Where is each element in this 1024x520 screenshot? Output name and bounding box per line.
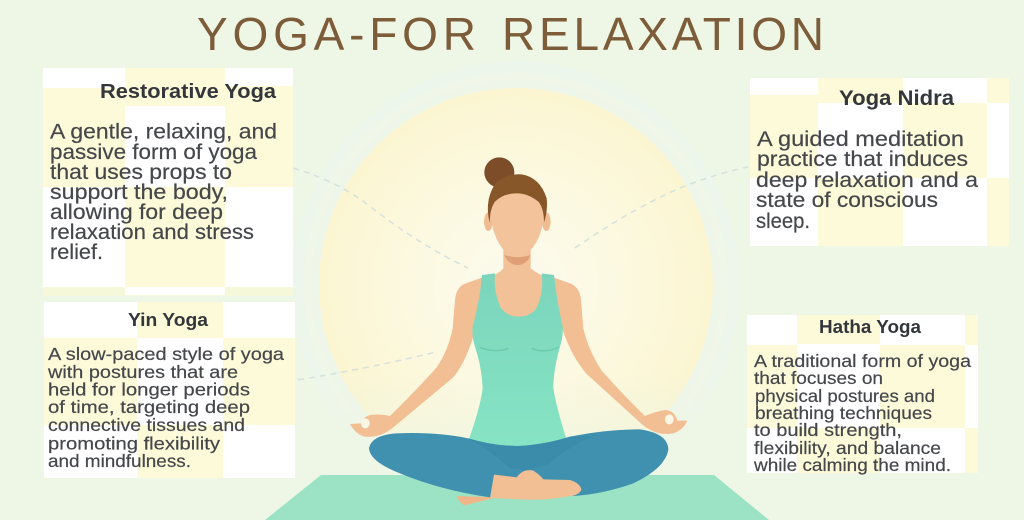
title: YOGA-FOR — [197, 8, 476, 60]
body text: relief. — [50, 240, 103, 264]
body text: state of conscious — [756, 188, 938, 212]
body text — [50, 120, 277, 264]
dashed connector: Restorative Yoga — [293, 168, 468, 268]
mat — [265, 475, 769, 520]
bun — [484, 157, 514, 187]
body text: passive form of yoga — [50, 140, 257, 164]
title — [197, 8, 824, 60]
heading: Hatha Yoga — [819, 317, 922, 337]
heading: Yoga Nidra — [839, 87, 954, 110]
panel background — [750, 78, 1009, 246]
body text: that focuses on — [754, 368, 883, 388]
body text — [756, 127, 978, 233]
body text: held for longer periods — [48, 380, 250, 400]
body text: deep relaxation and a — [756, 168, 978, 192]
body text — [753, 351, 971, 475]
finger details — [361, 418, 370, 428]
heading: Restorative Yoga — [100, 81, 277, 103]
panel background — [747, 315, 978, 473]
arm right — [553, 277, 687, 434]
body text: practice that induces — [757, 147, 968, 171]
body text: while calming the mind. — [753, 455, 951, 475]
heading: Yin Yoga — [128, 310, 209, 330]
body text: breathing techniques — [755, 403, 932, 423]
body text: sleep. — [756, 209, 810, 233]
tank top — [465, 273, 570, 450]
body text: and mindfulness. — [48, 451, 191, 471]
body text: with postures that are — [47, 362, 238, 382]
panel background — [44, 302, 295, 478]
legs — [369, 429, 668, 497]
panel: Hatha Yoga — [747, 315, 978, 475]
body text: support the body, — [50, 180, 228, 204]
body text: allowing for deep — [50, 200, 223, 224]
title: RELAXATION — [502, 8, 824, 60]
figure: meditating woman — [350, 157, 687, 505]
body text: relaxation and stress — [50, 220, 254, 244]
halo circle behind figure — [280, 61, 750, 509]
body text: of time, targeting deep — [48, 397, 250, 417]
body text: A guided meditation — [757, 127, 964, 151]
body text: A traditional form of yoga — [754, 351, 971, 371]
panel: Yoga Nidra — [750, 78, 1009, 246]
tank creases — [480, 347, 558, 351]
body text: A slow-paced style of yoga — [48, 344, 284, 364]
panel: Restorative Yoga — [43, 68, 293, 296]
face — [491, 193, 544, 257]
body text: connective tissues and — [48, 415, 245, 435]
dashed connector: Yoga Nidra — [575, 167, 748, 248]
body text: to build strength, — [754, 420, 902, 440]
body text: flexibility, and balance — [754, 438, 941, 458]
ears — [484, 212, 493, 231]
body text — [47, 344, 284, 471]
body text: A gentle, relaxing, and — [50, 120, 277, 144]
chin shadow — [504, 255, 531, 265]
panel background — [43, 68, 293, 296]
hair — [488, 174, 547, 223]
front foot — [490, 470, 581, 500]
body text: that uses props to — [50, 160, 232, 184]
dashed connector: Yin Yoga — [298, 352, 436, 380]
panel: Yin Yoga — [44, 302, 295, 478]
body text: promoting flexibility — [48, 434, 220, 454]
body text: physical postures and — [755, 386, 935, 406]
legs shade — [468, 436, 593, 470]
neck and chest — [490, 250, 545, 320]
back foot — [457, 496, 497, 505]
arm left — [350, 277, 483, 437]
